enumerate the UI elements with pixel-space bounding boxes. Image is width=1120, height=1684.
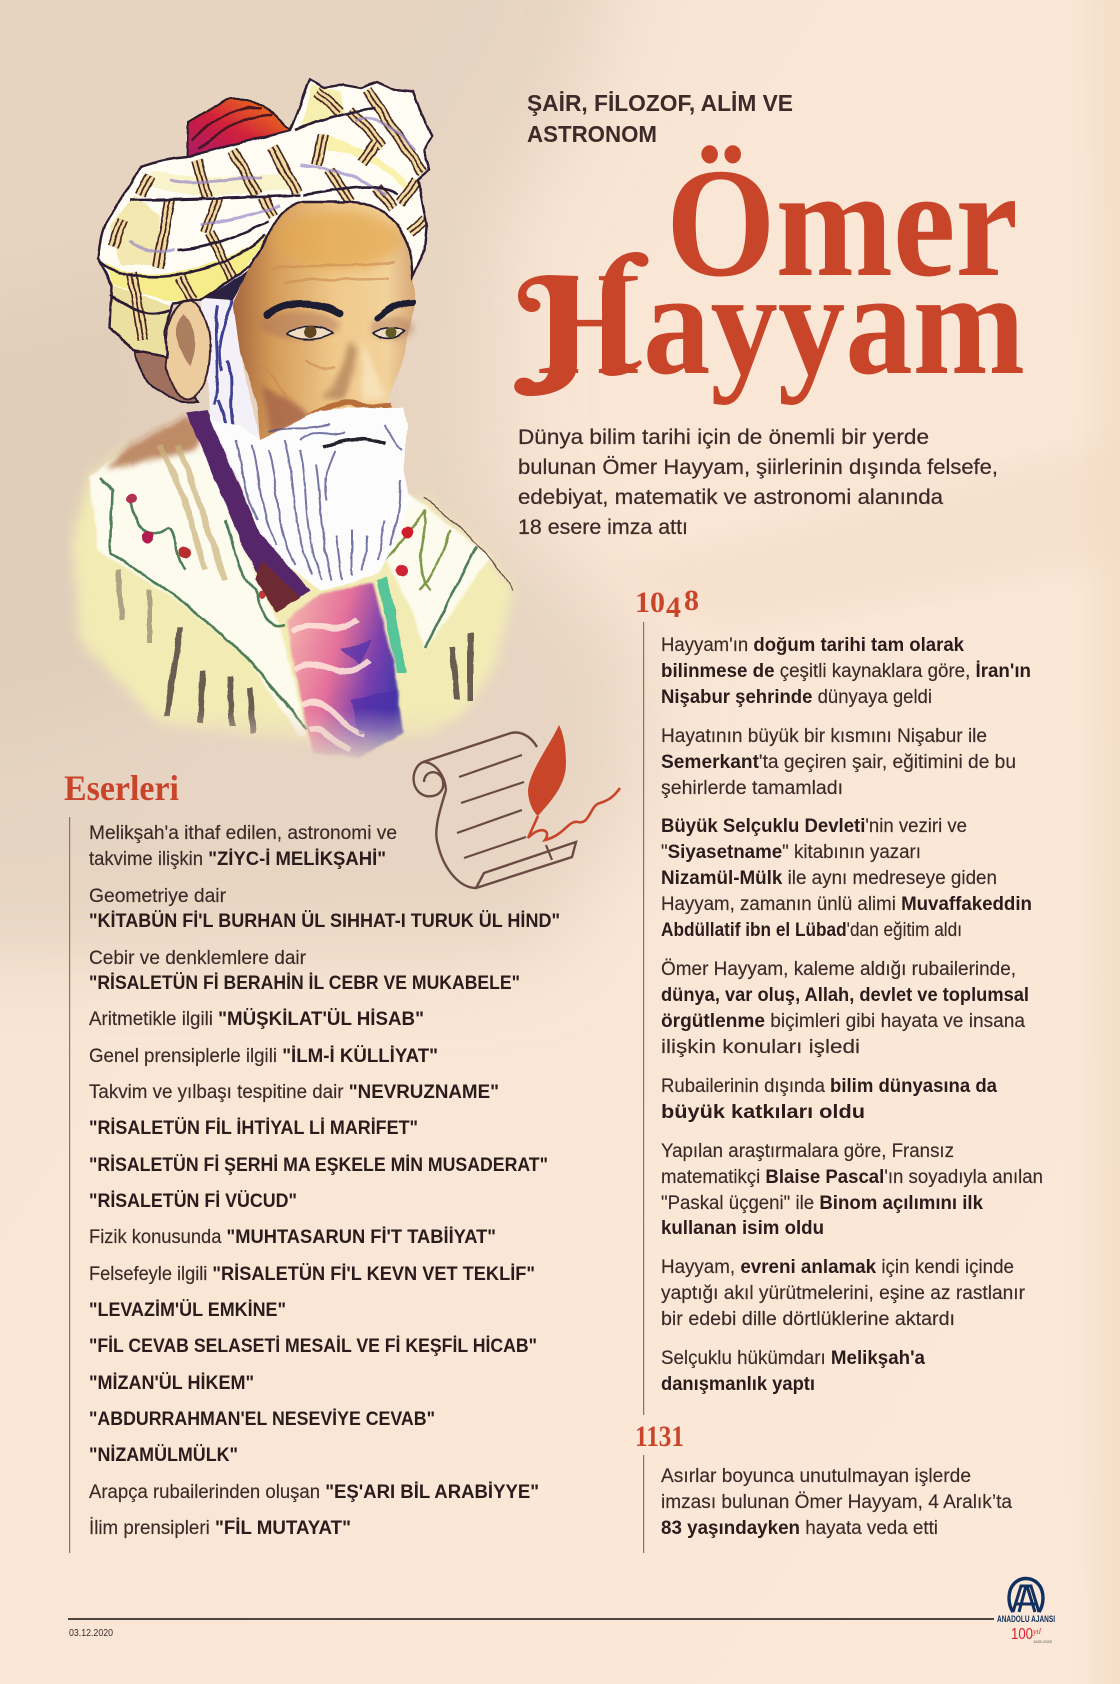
biography text: Hayyam'ın doğum tarihi tam olarak xyxy=(661,635,964,656)
logo: Anadolu Ajansı xyxy=(997,1578,1055,1644)
works list text: "MİZAN'ÜL HİKEM" xyxy=(89,1373,254,1394)
works list text: Geometriye dair xyxy=(89,886,227,907)
biography text: Semerkant'ta geçiren şair, eğitimini de bu xyxy=(661,752,1016,773)
portrait beard xyxy=(210,407,410,590)
works list text: "RİSALETÜN Fİ BERAHİN İL CEBR VE MUKABELE" xyxy=(89,973,520,994)
works list text: Genel prensiplerle ilgili "İLM-İ KÜLLİYAT" xyxy=(89,1046,438,1067)
year heading 1048: 1 xyxy=(635,586,650,619)
works list text: Melikşah'a ithaf edilen, astronomi ve xyxy=(89,823,397,844)
intro paragraph: bulunan Ömer Hayyam, şiirlerinin dışında felsefe, xyxy=(518,456,998,479)
panel: timeline 1131 xyxy=(635,1420,1012,1553)
works list text: "FİL CEVAB SELASETİ MESAİL VE Fİ KEŞFİL HİCAB" xyxy=(89,1336,537,1357)
intro paragraph: 18 esere imza attı xyxy=(518,516,688,539)
biography text: "Siyasetname" kitabının yazarı xyxy=(661,842,921,863)
works list text: Arapça rubailerinden oluşan "EŞ'ARI BİL ARABİYYE" xyxy=(89,1482,539,1503)
death text: Asırlar boyunca unutulmayan işlerde xyxy=(661,1466,971,1487)
intro paragraph: Dünya bilim tarihi için de önemli bir yerde xyxy=(518,426,929,449)
biography text: örgütlenme biçimleri gibi hayata ve insana xyxy=(661,1011,1025,1032)
death text: 83 yaşındayken hayata veda etti xyxy=(661,1518,938,1539)
portrait face xyxy=(233,202,415,440)
logo: Anadolu Ajansı: yıl xyxy=(1032,1627,1042,1636)
intro paragraph xyxy=(518,426,998,539)
biography text: bir edebi dille dörtlüklerine aktardı xyxy=(661,1309,955,1330)
biography text xyxy=(661,635,1043,1395)
works list text xyxy=(89,823,560,1539)
portrait nape hair xyxy=(135,352,198,402)
title: Ömer xyxy=(666,136,1018,309)
left column rule xyxy=(69,817,70,1553)
subtitle xyxy=(527,90,793,147)
logo: Anadolu Ajansı: ANADOLU AJANSI xyxy=(997,1614,1055,1624)
biography text: Nişabur şehrinde dünyaya geldi xyxy=(661,687,932,708)
biography text: Hayatının büyük bir kısmını Nişabur ile xyxy=(661,726,987,747)
biography text: danışmanlık yaptı xyxy=(661,1374,815,1395)
works list text: Felsefeyle ilgili "RİSALETÜN Fİ'L KEVN VET TEKLİF" xyxy=(89,1264,535,1285)
biography text: Hayyam, zamanın ünlü alimi Muvaffakeddin xyxy=(661,894,1032,915)
portrait of Ömer Hayyam xyxy=(72,80,513,758)
subtitle: ŞAİR, FİLOZOF, ALİM VE xyxy=(527,90,793,116)
works list text: "KİTABÜN Fİ'L BURHAN ÜL SIHHAT-I TURUK ÜL HİND" xyxy=(89,911,560,932)
portrait dark collar band xyxy=(187,410,310,613)
biography text: "Paskal üçgeni" ile Binom açılımını ilk xyxy=(661,1193,983,1214)
title: H xyxy=(535,242,642,406)
works list text: "LEVAZİM'ÜL EMKİNE" xyxy=(89,1300,286,1321)
biography text: Büyük Selçuklu Devleti'nin veziri ve xyxy=(661,816,967,837)
biography text: yaptığı akıl yürütmelerini, eşine az rastlanır xyxy=(661,1283,1026,1304)
biography text: Rubailerinin dışında bilim dünyasına da xyxy=(661,1076,997,1097)
works list text: Aritmetikle ilgili "MÜŞKİLAT'ÜL HİSAB" xyxy=(89,1009,424,1030)
logo: Anadolu Ajansı: 1920-2020 xyxy=(1033,1639,1053,1644)
portrait robe xyxy=(72,415,513,758)
biography text: Nizamül-Mülk ile aynı medreseye giden xyxy=(661,868,997,889)
works list text: "RİSALETÜN Fİ ŞERHİ MA EŞKELE MİN MUSADERAT" xyxy=(89,1155,548,1176)
portrait facial features xyxy=(267,302,413,339)
biography text: ilişkin konuları işledi xyxy=(661,1037,860,1058)
works list text: takvime ilişkin "ZİYC-İ MELİKŞAHİ" xyxy=(89,849,386,870)
works list text: Cebir ve denklemlere dair xyxy=(89,948,307,969)
biography text: Yapılan araştırmalara göre, Fransız xyxy=(661,1141,954,1162)
biography text: şehirlerde tamamladı xyxy=(661,778,843,799)
subtitle: ASTRONOM xyxy=(527,121,657,147)
year heading 1048: 8 xyxy=(684,584,699,617)
logo: Anadolu Ajansı: 100 xyxy=(1011,1626,1033,1643)
intro paragraph: edebiyat, matematik ve astronomi alanında xyxy=(518,486,943,509)
death text xyxy=(661,1466,1012,1539)
death text: imzası bulunan Ömer Hayyam, 4 Aralık’ta xyxy=(661,1492,1012,1513)
year heading 1048: 0 xyxy=(650,586,665,619)
year heading 1048: 4 xyxy=(666,591,681,624)
portrait ear xyxy=(166,301,210,399)
biography text: matematikçi Blaise Pascal'ın soyadıyla anılan xyxy=(661,1167,1043,1188)
works list text: "RİSALETÜN FİL İHTİYAL Lİ MARİFET" xyxy=(89,1118,418,1139)
portrait cap xyxy=(187,97,292,158)
works list text: "ABDURRAHMAN'EL NESEVİYE CEVAB" xyxy=(89,1409,435,1430)
panel: timeline 1048 xyxy=(635,584,1043,1415)
title xyxy=(514,136,1025,406)
works list text: Fizik konusunda "MUHTASARUN Fİ'T TABİİYAT" xyxy=(89,1227,496,1248)
biography text: bilinmese de çeşitli kaynaklara göre, İran'ın xyxy=(661,661,1031,682)
biography text: dünya, var oluş, Allah, devlet ve toplumsal xyxy=(661,985,1029,1006)
works list text: İlim prensipleri "FİL MUTAYAT" xyxy=(89,1518,351,1539)
biography text: büyük katkıları oldu xyxy=(661,1102,865,1123)
heading: Eserleri: Eserleri xyxy=(64,768,179,808)
portrait turban xyxy=(98,80,432,357)
footer rule xyxy=(68,1618,994,1620)
rule 1048 xyxy=(643,622,644,1415)
biography text: Ömer Hayyam, kaleme aldığı rubailerinde, xyxy=(661,959,1016,980)
biography text: Abdüllatif ibn el Lübad'dan eğitim aldı xyxy=(661,920,962,941)
title: ayyam xyxy=(643,242,1025,406)
rule 1131 xyxy=(643,1455,644,1553)
date: 03.12.2020 xyxy=(69,1628,113,1639)
works list text: "NİZAMÜLMÜLK" xyxy=(89,1445,238,1466)
biography text: kullanan isim oldu xyxy=(661,1218,824,1239)
biography text: Selçuklu hükümdarı Melikşah'a xyxy=(661,1348,925,1369)
portrait hair behind ear xyxy=(200,267,260,470)
portrait scarf xyxy=(287,583,403,758)
year heading 1131: 1131 xyxy=(635,1420,684,1453)
biography text: Hayyam, evreni anlamak için kendi içinde xyxy=(661,1257,1014,1278)
panel: works list xyxy=(69,817,560,1553)
works list text: Takvim ve yılbaşı tespitine dair "NEVRUZNAME" xyxy=(89,1082,499,1103)
works list text: "RİSALETÜN Fİ VÜCUD" xyxy=(89,1191,297,1212)
icon: scroll and quill xyxy=(414,725,620,888)
